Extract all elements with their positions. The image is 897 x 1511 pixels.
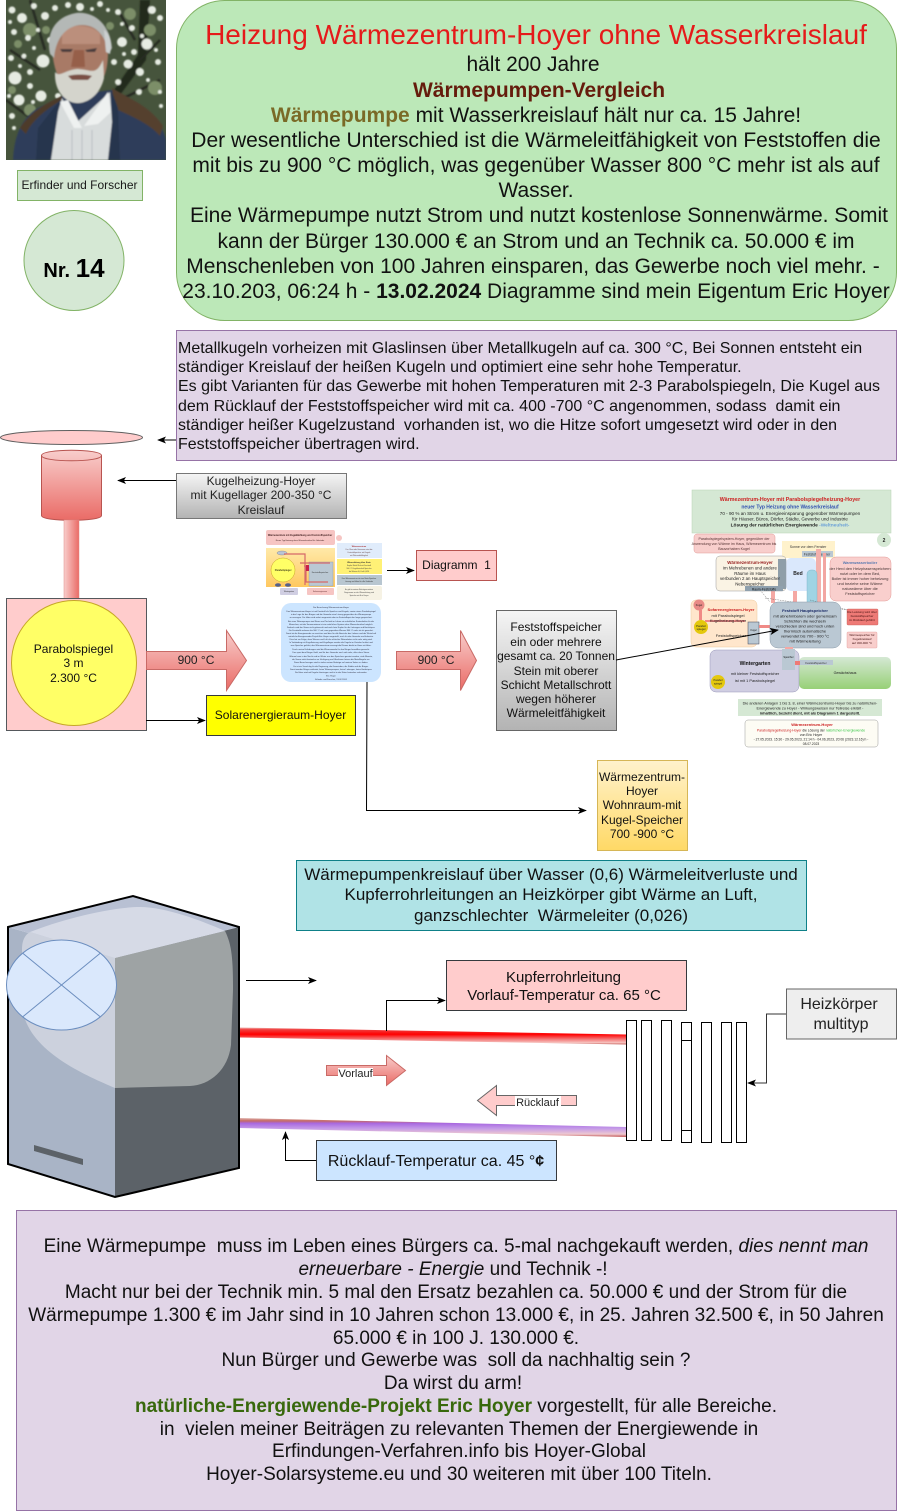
arrow: Vorlauf — [326, 1056, 406, 1086]
jacket — [13, 90, 166, 160]
panel: Metallkugeln description: ständiger heißer Kugelzustand vorhanden ist, wo die Hitze sofort umgesetzt wird oder in den — [178, 417, 837, 434]
callout: Wärmepumpenkreislauf: Wärmepumpenkreislauf über Wasser (0,6) Wärmeleitverluste und — [304, 865, 798, 884]
summary text — [182, 53, 890, 303]
box: Feststoffspeicher — [496, 610, 616, 730]
cylinder: Kugelheizung — [42, 450, 102, 520]
summary text: Wasser. — [498, 179, 574, 202]
diagram thumbnail: Wärmezentrum mit Parabolspiegelheizung: Parabol — [714, 678, 723, 682]
label: Kupferrohrleitung: Vorlauf-Temperatur ca. 65 °C — [467, 987, 661, 1004]
connector to Solarenergieraum — [146, 720, 205, 722]
diagram thumbnail: Wärmezentrum mit Parabolspiegelheizung: von Eric Hoyer — [800, 733, 823, 737]
diagram thumbnail: Wärmezentrum mit Parabolspiegelheizung: auf 300-900 °C — [852, 641, 873, 645]
thumbnail: text sheet: Die Berechnung Wärmezentrum-Hoyer — [313, 606, 349, 609]
thumbnail: text sheet: In Verbindung mit Kugelheizung und Kugellager werden die Kugeln im Kreislauf erhitzt und — [289, 641, 374, 644]
box: Wärmezentrum-Hoyer Wohnraum: Hoyer — [626, 784, 658, 798]
diagram thumbnail: Wärmezentrum mit Parabolspiegelheizung: Räume im Haus — [734, 571, 767, 576]
box: Feststoffspeicher: Feststoffspeicher — [510, 620, 602, 634]
diagram thumbnail: Wärmezentrum mit Parabolspiegelheizung: Feststoffspeicher — [804, 552, 831, 556]
panel: conclusion text: Da wirst du arm! — [384, 1373, 522, 1394]
thumbnail: text sheet — [281, 603, 381, 682]
summary text: Wärmepumpe mit Wasserkreislauf hält nur ca. 15 Jahre! — [271, 104, 801, 127]
label: Rücklauf-Temperatur: Rücklauf-Temperatur ca. 45 °¢ — [328, 1153, 544, 1170]
label: Kugelheizung-Hoyer — [176, 474, 346, 518]
thumbnail: Diagramm 1: Feststoffspeicher mit Kugeln — [348, 551, 370, 554]
panel: conclusion text: in vielen meiner Beiträgen zu relevanten Themen der Energiewende in — [160, 1419, 758, 1440]
box: Feststoffspeicher: gesamt ca. 20 Tonnen — [497, 649, 615, 663]
diagram thumbnail: Wärmezentrum mit Parabolspiegelheizung: Kugelkreislauf — [853, 637, 872, 641]
thumbnail: Diagramm 1: 900 °C Kugelkreislauf Speicher — [347, 568, 372, 570]
diagram thumbnail: Wärmezentrum mit Parabolspiegelheizung: Feststoff Hauptspeicher — [782, 608, 828, 613]
diagram thumbnail: Wärmezentrum mit Parabolspiegelheizung: verbunden 2 an Hauptspeicher — [720, 576, 781, 581]
diagram thumbnail: Wärmezentrum mit Parabolspiegelheizung: Sofarenergieraum-Hoyer — [708, 607, 755, 612]
diagram thumbnail: Wärmezentrum mit Parabolspiegelheizung: Bauvorhaben Kugel — [718, 547, 750, 551]
thumbnail: text sheet: Diese Berechnungen sind in vielen meiner Beiträge auf meinen Seiten zu finden. — [294, 661, 369, 664]
diagram thumbnail: Wärmezentrum mit Parabolspiegelheizung: ist mit 1 Parabolspiegel — [735, 678, 775, 683]
diagram thumbnail: Wärmezentrum mit Parabolspiegelheizung: Parabol — [696, 624, 706, 628]
pipe: vertical ball conveyor — [64, 520, 79, 600]
thumbnail: Diagramm 1: Lösung und Hitze für alle Gebäude — [345, 580, 373, 583]
diagram thumbnail: Wärmezentrum mit Parabolspiegelheizung: Sonne vor dem Fenster — [790, 545, 827, 549]
parabolic mirror unit: 3 m — [63, 656, 84, 670]
diagram thumbnail: Wärmezentrum mit Parabolspiegelheizung: nutzt oder im dem Bed, — [840, 571, 880, 576]
thumbnail: Diagramm 1: Neuer Typ Heizung ohne Wasserkreislauf für Gebäude — [276, 540, 325, 542]
box: Wärmezentrum-Hoyer Wohnraum: 700 -900 °C — [610, 827, 674, 841]
diagram header: 70 - 90 % an Strom u. Energieeinsparung gegenüber Wärmepumpen — [720, 511, 861, 516]
diagram thumbnail: Wärmezentrum mit Parabolspiegelheizung: Feststoffspeicher — [845, 591, 875, 596]
arrow: 900 °C to storage — [146, 630, 246, 690]
arrow: thumbnail to Diagramm 1 — [387, 570, 414, 572]
diagram thumbnail: Wärmezentrum mit Parabolspiegelheizung: Parabolspiegelheizung-Hoyer die Lösung der natürlichen-Energiewende — [757, 728, 865, 732]
callout: Wärmepumpenkreislauf: Kupferrohrleitungen an Heizkörper gibt Wärme an Luft, — [345, 885, 757, 904]
diagram thumbnail: Wärmezentrum mit Parabolspiegelheizung: Wintergarten — [740, 661, 770, 667]
radiators — [626, 1020, 746, 1142]
thumbnail: Diagramm 1: Feststoffspeicher — [312, 571, 329, 574]
diagram thumbnail: Wärmezentrum mit Parabolspiegelheizung: der Herd den Heizphasenspeichern — [829, 566, 891, 571]
pipe: Vorlauf red — [239, 1028, 626, 1044]
thumbnail: text sheet: zu erzeugen. Die Hitze wird sofort umgesetzt oder im Feststoffspeicher lange gespeichert. — [290, 616, 373, 619]
box: Wärmezentrum-Hoyer Wohnraum: Wohnraum-mit — [603, 798, 682, 812]
diagram thumbnail: Wärmezentrum mit Parabolspiegelheizung: Energiewende zu Hoyer - Wirkungsweisen nur Teilreise erklärt - — [757, 706, 864, 710]
diagram thumbnail: Wärmezentrum mit Parabolspiegelheizung: 08.07.2023 — [803, 742, 819, 746]
diagram header: neuer Typ Heizung ohne Wasserkreislauf — [741, 504, 839, 510]
arrow: Kugelheizung label to cylinder — [118, 480, 176, 482]
diagram thumbnail: Wärmezentrum mit Parabolspiegelheizung: verwendet bis 700 - 900 °C — [781, 634, 829, 638]
diagram thumbnail: Wärmezentrum mit Parabolspiegelheizung: im Rücklauf geführt — [849, 618, 875, 622]
connector: Kupferrohr to pipe — [386, 1000, 445, 1031]
diagram thumbnail: Wärmezentrum mit Parabolspiegelheizung — [691, 490, 891, 747]
panel: conclusion text — [16, 1210, 896, 1510]
diagram thumbnail: Wärmezentrum mit Parabolspiegelheizung: Kugelheizung-Hoyer — [710, 618, 747, 623]
arrow: Feststoffspeicher to main diagram — [616, 630, 778, 660]
thumbnail: text sheet: Dadurch wird der Strom nicht gebraucht und auch kein Kupfer für die Leitungen und Heizkörper. — [287, 626, 375, 629]
thumbnail: Diagramm 1: Wintergarten — [284, 590, 294, 593]
diagram header: für Häuser, Büros, Dörfer, Städte, Gewerbe und Industrie — [732, 516, 848, 522]
box: Feststoffspeicher: ein oder mehrere — [510, 635, 602, 649]
label: Kugelheizung-Hoyer: Kugelheizung-Hoyer — [207, 474, 315, 488]
diagram thumbnail: Wärmezentrum mit Parabolspiegelheizung: spiegel — [697, 627, 706, 631]
diagram thumbnail: Wärmezentrum mit Parabolspiegelheizung: Boiler ist immer hoher beheizung — [832, 576, 888, 581]
diagram thumbnail: Wärmezentrum mit Parabolspiegelheizung: Kugel — [696, 604, 703, 607]
photo: inventor portrait — [6, 0, 166, 160]
box: Feststoffspeicher: wegen höherer — [515, 692, 596, 706]
callout: Wärmepumpenkreislauf: ganzschlechter Wärmeleiter (0,026) — [414, 906, 688, 925]
thumbnail: text sheet: die Sonne steht kostenlos zur Verfügung und Glaslinsen heizen die Metallkugeln vor. — [292, 658, 370, 661]
thumbnail: text sheet: Das Wärmezentrum-Hoyer ist mit Feststoff als Speicher und Kugeln, sowie einem Parabolspiegel — [286, 610, 376, 613]
face — [52, 24, 109, 76]
thumbnail: text sheet: Erfinder und Forscher, 13.02.2024 — [315, 678, 348, 681]
badge: Nr. 14: Nr. 14 — [43, 253, 105, 283]
summary text: 23.10.203, 06:24 h - 13.02.2024 Diagramme sind mein Eigentum Eric Hoyer — [182, 280, 890, 303]
diagram thumbnail: Wärmezentrum mit Parabolspiegelheizung: Parabolspiegelsystem-Hoyer, gegenüber der — [698, 537, 770, 541]
diagram thumbnail: Wärmezentrum mit Parabolspiegelheizung: verschieden sind und hoch unten — [776, 624, 834, 628]
box: Feststoffspeicher: Schicht Metallschrott — [501, 678, 612, 692]
thumbnail: Diagramm 1: Das Wärmezentrum ist eine Stein-Speicher — [342, 577, 377, 580]
diagram thumbnail: Wärmezentrum mit Parabolspiegelheizung: Schichten die wechseln — [784, 618, 826, 624]
thumbnail: Diagramm 1: Kupfer Metall Schrott Feststoff — [347, 564, 372, 567]
arrow: flow direction — [246, 980, 316, 982]
diagram thumbnail: Wärmezentrum mit Parabolspiegelheizung: Die Leistung wird über — [847, 610, 877, 614]
thumbnail: text sheet: zum Speicher geführt; das Wärmezentrum versorgt die Räume direkt im Haus mit Hitze. — [291, 644, 372, 647]
diagram thumbnail: Wärmezentrum mit Parabolspiegelheizung: spiegel — [714, 682, 723, 686]
parabolic mirror unit: 2.300 °C — [50, 671, 97, 685]
thumbnail: text sheet: Eric Hoyer — [326, 674, 336, 678]
arrow: panel to mirror disc — [158, 439, 176, 441]
callout: Wärmepumpenkreislauf — [296, 860, 806, 930]
diagram thumbnail: Wärmezentrum mit Parabolspiegelheizung: mit Wärmeleitung — [789, 638, 821, 644]
label: Rücklauf-Temperatur — [316, 1140, 556, 1180]
arrow: 900 °C to Feststoffspeicher: 900 °C — [418, 653, 455, 667]
diagram thumbnail: Wärmezentrum mit Parabolspiegelheizung: Bed — [793, 571, 803, 577]
panel: conclusion text: Macht nur bei der Technik min. 5 mal den Ersatz bezahlen ca. 50.000 € und der Strom für die — [65, 1282, 847, 1303]
thumbnail: Diagramm 1: Solarenergieraum — [313, 591, 328, 593]
diagram thumbnail: Wärmezentrum mit Parabolspiegelheizung: mit abnehmbarem oder gemeinsam — [773, 614, 837, 618]
thumbnail: text sheet: Die Feststoffe nehmen bis 900 °C auf, was gegenüber Wasser 800 °C mehr ist als gewohnt. — [289, 629, 374, 632]
summary text: hält 200 Jahre — [466, 53, 600, 76]
summary text: Wärmepumpen-Vergleich — [413, 79, 665, 102]
label: Solarenergieraum-Hoyer — [206, 696, 356, 736]
diagram thumbnail: Wärmezentrum mit Parabolspiegelheizung: Gewächshaus — [834, 671, 857, 675]
diagram thumbnail: Wärmezentrum mit Parabolspiegelheizung: Feststoffspeicher — [805, 661, 827, 665]
diagram thumbnail: Wärmezentrum mit Parabolspiegelheizung: Warmwasserboiler — [843, 560, 878, 565]
diagram thumbnail: Wärmezentrum mit Parabolspiegelheizung: Wärmezentrum-Hoyer — [791, 722, 833, 727]
diagram thumbnail: Wärmezentrum mit Parabolspiegelheizung: Feststoffspeicher — [851, 614, 873, 618]
thumbnail: text sheet: Menschen; mit der Sonnenwärme ist ein natürliches System ohne Wasserkreislauf möglich. — [289, 623, 373, 626]
label: Kupferrohrleitung — [446, 960, 686, 1010]
diagram thumbnail: Wärmezentrum mit Parabolspiegelheizung: naturwärme über die — [842, 586, 878, 591]
diagram thumbnail: Wärmezentrum mit Parabolspiegelheizung: Nebenspeicher — [735, 582, 765, 586]
label: Solarenergieraum-Hoyer: Solarenergieraum-Hoyer — [215, 708, 346, 722]
connector: Rücklauf label to pipe — [286, 1132, 316, 1160]
thumbnail: text sheet: Damit ist die Energiewende zu erreichen und dies für alle Bereiche des Lebens und der Wirtschaft — [286, 632, 376, 635]
thumbnail: text sheet: Das spart dem Bürger Geld, und für das Gewerbe noch viel mehr, alles ohne Strom. — [292, 651, 370, 654]
fan — [6, 940, 116, 1030]
label: Heizkörper multityp: multityp — [813, 1016, 869, 1033]
panel: Metallkugeln description: Metallkugeln vorheizen mit Glaslinsen über Metallkugeln auf ca. 300 °C, Bei Sonnen entsteht ein — [178, 340, 862, 357]
label: Kugelheizung-Hoyer: mit Kugellager 200-350 °C — [191, 488, 332, 502]
label: Diagramm 1 — [416, 550, 496, 580]
panel: Metallkugeln description: Es gibt Varianten für das Gewerbe mit hohen Temperaturen mit 2-3 Parabolspiegeln, Die Kugel aus — [178, 378, 880, 395]
panel: conclusion text: 65.000 € in 100 J. 130.000 €. — [333, 1328, 579, 1349]
parabolic mirror unit — [6, 598, 146, 730]
thumbnail: Diagramm 1: Wärmezentrum — [352, 545, 366, 548]
diagram thumbnail: Wärmezentrum mit Parabolspiegelheizung: Wärmezentrum-Hoyer — [727, 560, 773, 565]
label: Erfinder und Forscher — [18, 170, 142, 200]
arrow: Rücklauf — [478, 1086, 576, 1116]
diagram thumbnail: Wärmezentrum mit Parabolspiegelheizung: Anwendung von Wärme im Haus, Wärmezentrum bis — [692, 542, 777, 546]
summary text: Eine Wärmepumpe nutzt Strom und nutzt kostenlose Sonnenwärme. Somit — [190, 204, 888, 227]
badge: Nr. 14 — [24, 210, 124, 310]
panel: conclusion text: Nun Bürger und Gewerbe was soll da nachhaltig sein ? — [222, 1350, 690, 1371]
box: Wärmezentrum-Hoyer Wohnraum: Kugel-Speicher — [601, 813, 683, 827]
panel: conclusion text: natürliche-Energiewende-Projekt Eric Hoyer vorgestellt, für alle Bereiche. — [135, 1396, 777, 1417]
thumbnail: Diagramm 1: Es gibt in meinen Beiträgen weitere — [345, 588, 373, 591]
diagram thumbnail: Wärmezentrum mit Parabolspiegelheizung: 2 — [883, 538, 886, 544]
arrow: Vorlauf: Vorlauf — [338, 1068, 374, 1080]
title: Heizung Wärmezentrum-Hoyer ohne Wasserkreislauf — [205, 19, 867, 50]
pipe: Rücklauf purple — [239, 1118, 626, 1137]
label: Heizkörper multityp — [786, 989, 896, 1039]
label: Heizkörper multityp: Heizkörper — [800, 996, 878, 1013]
diagram thumbnail: Wärmezentrum mit Parabolspiegelheizung: thermisch automatische — [784, 628, 827, 634]
box: Feststoffspeicher: Wärmeleitfähigkeit — [507, 706, 606, 720]
arrow: 900 °C to storage: 900 °C — [178, 653, 215, 667]
thumbnail: text sheet: natürliche-Energiewende-Projekt Eric Hoyer vorgestellt, auch für das Gewerbe und Industrie. — [288, 635, 374, 638]
arrow: Rücklauf: Rücklauf — [516, 1097, 560, 1109]
thumbnail: text sheet: Dies hat zur Folge, dass Wasser und Luft als schlechte Wärmeleiter nicht mehr nötig sind. — [290, 638, 373, 641]
panel: conclusion text: Wärmepumpe 1.300 € im Jahr sind in 10 Jahren schon 13.000 €, in 25. Jahren 32.500 €, in 50 Jahren — [28, 1305, 884, 1326]
diagram thumbnail: Wärmezentrum mit Parabolspiegelheizung: Die anderen Anlagen 1 bis 3, 8, einer Wärmezentrums-Hoyer bis zu natürlichen- — [743, 702, 878, 706]
thumbnail: text sheet: Bei einer Wärmepumpe sind Strom und Technik im Leben ein erheblicher Kostenfaktor für die — [288, 620, 375, 623]
label: Erfinder und Forscher: Erfinder und Forscher — [21, 178, 138, 192]
panel: headline summary — [176, 0, 896, 320]
diagram thumbnail: Wärmezentrum mit Parabolspiegelheizung: Feststoffspeicher — [716, 633, 747, 638]
box: Wärmezentrum-Hoyer Wohnraum — [598, 760, 688, 850]
thumbnail: text sheet: Die Hitze wird mit Kugeln übertragen und ist in der Natur kostenlos vorhanden. — [295, 671, 368, 674]
diagram thumbnail: Wärmezentrum mit Parabolspiegelheizung: mit Parabolspiegel — [712, 613, 745, 618]
panel: conclusion text: Erfindungen-Verfahren.info bis Hoyer-Global — [272, 1441, 646, 1462]
box: Wärmezentrum-Hoyer Wohnraum: Wärmezentrum- — [599, 770, 685, 784]
diagram thumbnail: Wärmezentrum mit Parabolspiegelheizung: Speicher — [783, 655, 794, 659]
summary text: Menschenleben von 100 Jahren einsparen, das Gewerbe noch viel mehr. - — [186, 255, 880, 278]
thumbnail: Diagramm 1: mit Wärmeleitfähigkeit — [350, 554, 368, 557]
thumbnail: Diagramm 1: Parabolspiegel — [275, 569, 292, 572]
thumbnail: Diagramm 1: Diagramme zu der Wärmeleitung und — [344, 591, 374, 594]
diagram thumbnail: Wärmezentrum mit Parabolspiegelheizung: - 27.05.2023. 15:30 - 29.05.2023, 21:14 h - 04.06.2023, 20:06 (2023.12.16) h - — [754, 738, 868, 742]
panel: Metallkugeln description: ständiger Kreislauf der heißen Kugeln und optimiert eine sehr hohe Temperatur. — [178, 359, 742, 376]
heat pump unit — [8, 896, 239, 1197]
mirror disc — [0, 430, 142, 444]
thumbnail: text sheet: Damit werden Bürger entlastet, keine Wärmepumpen, keine Leitungen, keine Heizkörper. — [290, 668, 372, 671]
thumbnail: Diagramm 1: Speicher mit Eric Hoyer — [350, 594, 369, 597]
box: Feststoffspeicher: Stein mit oberer — [514, 664, 598, 678]
label: Diagramm 1: Diagramm 1 — [422, 558, 491, 572]
thumbnail: Diagramm 1: Wärmezentrum mit Zugabkühlung und Feststoffspeicher — [268, 534, 332, 537]
summary text: mit bis zu 900 °C möglich, was gegenüber Wasser 800 °C mehr ist als auf — [192, 154, 880, 177]
diagram thumbnail: Wärmezentrum mit Parabolspiegelheizung: und beziehe seine Wärme — [837, 581, 883, 586]
panel: conclusion text: Eine Wärmepumpe muss im Leben eines Bürgers ca. 5-mal nachgekauft werden, dies nennt man — [44, 1236, 868, 1257]
thumbnail: Diagramm 1: Wärmeleitung über Stein — [347, 561, 372, 564]
thumbnail: text sheet: Wärme kann in der Nacht und im Winter aus den Speichern genutzt werden, viele Monate, — [289, 655, 373, 658]
diagram thumbnail: Wärmezentrum mit Parabolspiegelheizung: Kugel — [750, 629, 757, 632]
diagram header: Lösung der natürlichen Energiewende -Weltneuheit- — [731, 522, 850, 528]
panel: Metallkugeln description — [176, 330, 896, 460]
thumbnail: text sheet: in der Lage für den Bürger und die Gewerbe eine Lösung gegenüber der Wärmepumpe — [291, 613, 372, 616]
connector: sheet to Wärmezentrum Wohnraum — [366, 682, 586, 810]
summary text: Der wesentliche Unterschied ist die Wärmeleitfähigkeit von Feststoffen die — [191, 129, 881, 152]
thumbnail: Diagramm 1 — [266, 530, 382, 600]
diagram thumbnail: Wärmezentrum mit Parabolspiegelheizung: Wärmespeicher für — [849, 633, 875, 637]
thumbnail: text sheet: Es ist ein Vorschlag für die Regierung, die Gemeinden, die Städte und die Bürger. — [293, 665, 369, 668]
diagram thumbnail: Wärmezentrum mit Parabolspiegelheizung: inhaltlich, bezieht dient, mit als Diagramm 1 dargestellt. — [760, 712, 860, 716]
panel: conclusion text: erneuerbare - Energie und Technik -! — [298, 1259, 608, 1280]
diagram thumbnail: Wärmezentrum mit Parabolspiegelheizung: mit kleiner Feststoffspeicher — [731, 671, 780, 676]
diagram thumbnail: Wärmezentrum mit Parabolspiegelheizung: im Mehrebenen und andere — [723, 566, 778, 570]
arrow: 900 °C to Feststoffspeicher — [396, 630, 476, 690]
thumbnail: Diagramm 1: Der Ofen oder Heizraum nutzt die — [346, 548, 372, 551]
diagram thumbnail: Wärmezentrum mit Parabolspiegelheizung: Raum-Feststoffe — [752, 588, 776, 592]
connector: Heizkörper label to radiators — [748, 1014, 786, 1083]
diagram header: Wärmezentrum-Hoyer mit Parabolspiegelheizung-Hoyer — [720, 497, 860, 503]
panel: conclusion text: Hoyer-Solarsysteme.eu und 30 weiteren mit über 100 Titeln. — [206, 1464, 712, 1485]
panel: Metallkugeln description: dem Rücklauf der Feststoffspeicher wird mit ca. 400 -700 °C angenommen, sodass damit ein — [178, 398, 840, 415]
summary text: kann der Bürger 130.000 € an Strom und an Technik ca. 50.000 € im — [217, 230, 855, 253]
parabolic mirror unit: Parabolspiegel — [34, 642, 113, 656]
panel: Metallkugeln description: Feststoffspeicher übertragen wird. — [178, 436, 420, 453]
thumbnail: text sheet: Durch meine Erfindungen wird die Wärmewende für den Bürger bezahlbar gemacht. — [292, 648, 370, 651]
diagram header — [692, 490, 891, 533]
label: Kupferrohrleitung: Kupferrohrleitung — [506, 969, 621, 986]
thumbnail: Diagramm 1: bis Wasser 0,6 Luft 0,026 — [349, 570, 369, 573]
label: Kugelheizung-Hoyer: Kreislauf — [238, 503, 285, 517]
